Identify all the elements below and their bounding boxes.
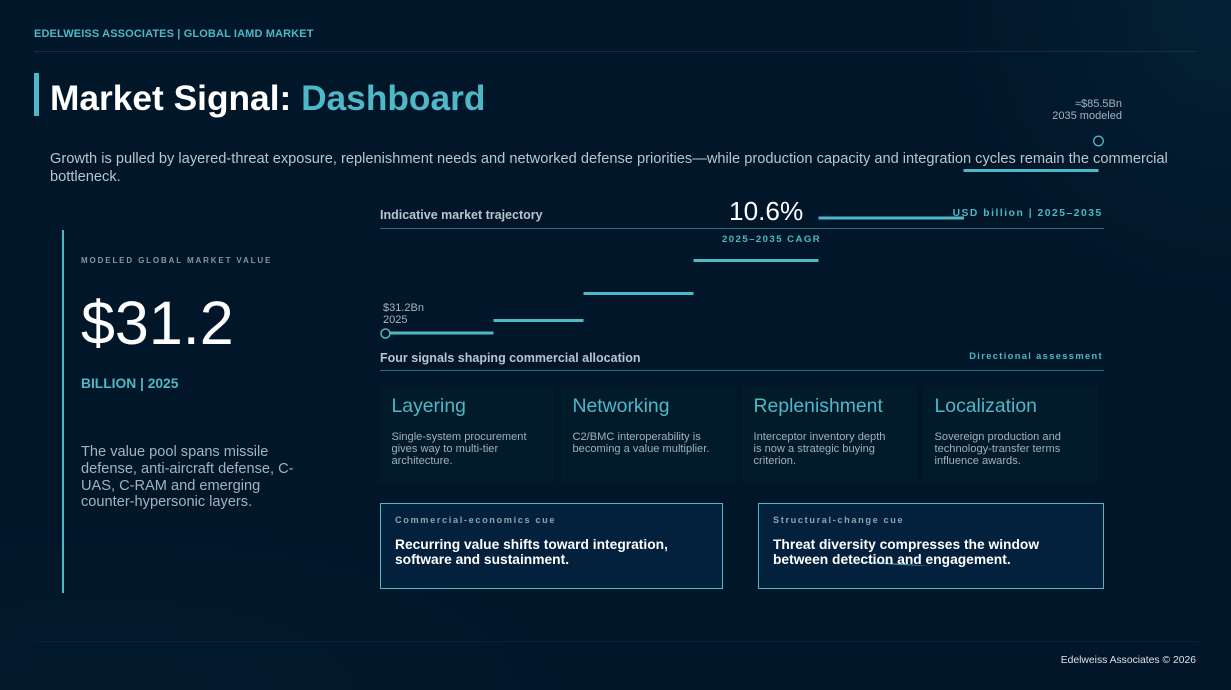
card heading: Networking [572,395,670,417]
card text: becoming a value multiplier. [572,443,709,455]
market value label: MODELED GLOBAL MARKET VALUE [81,256,272,265]
callout: commercial economics [380,503,723,589]
card heading: Replenishment [754,395,883,417]
callout message: Threat diversity compresses the window [773,537,1039,552]
card text: influence awards. [934,455,1021,467]
card: networking [561,386,736,483]
callout message: between detection and engagement. [773,552,1011,567]
end point label [1052,98,1122,122]
card text: C2/BMC interoperability is [572,431,701,443]
card text: Sovereign production and [934,431,1061,443]
card text: technology-transfer terms [934,443,1060,455]
card text: is now a strategic buying [754,443,875,455]
title: Market Signal: Dashboard [50,79,485,118]
card heading: Layering [392,395,466,417]
card text [934,431,1061,467]
market value figure: $31.2 [81,289,234,357]
card text: architecture. [392,455,453,467]
start point label: 2025 [383,314,407,326]
panel: market value [62,230,332,593]
eyebrow header: EDELWEISS ASSOCIATES | GLOBAL IAMD MARKET [34,28,314,40]
end point label: ≈$85.5Bn [1075,98,1122,110]
callout message [395,537,668,567]
callout: structural change [758,503,1104,589]
subtitle: Growth is pulled by layered-threat exposure, replenishment needs and networked defense priorities—while production capacity and integration cycles remain the commercial bottleneck. [50,151,1168,185]
card text [572,431,709,455]
market value unit: BILLION | 2025 [81,376,178,391]
title accent bar [34,73,39,116]
signals note: Directional assessment [969,351,1103,361]
start point label [383,302,424,326]
CAGR label: 2025–2035 CAGR [722,234,821,245]
card text: criterion. [754,455,796,467]
card text: Single-system procurement [392,431,527,443]
callout label: Commercial-economics cue [395,515,556,525]
signals heading: Four signals shaping commercial allocation [380,351,640,365]
callout message: software and sustainment. [395,552,569,567]
start point label: $31.2Bn [383,302,424,314]
callout label: Structural-change cue [773,515,904,525]
card: replenishment [742,386,917,483]
trajectory heading: Indicative market trajectory [380,208,543,222]
card heading: Localization [934,395,1037,417]
callout message: Recurring value shifts toward integration, [395,537,668,552]
footer: Edelweiss Associates © 2026 [1061,655,1196,666]
CAGR figure: 10.6% [729,196,803,226]
end point label: 2035 modeled [1052,110,1122,122]
market value description: The value pool spans missile defense, anti-aircraft defense, C-UAS, C-RAM and emerging counter-hypersonic layers. [81,444,294,510]
card text: Interceptor inventory depth [754,431,885,443]
card: localization [923,386,1098,483]
card: layering [380,386,555,483]
callout message [773,537,1040,567]
trajectory units: USD billion | 2025–2035 [953,208,1103,219]
card text: gives way to multi-tier [392,443,498,455]
card text [754,431,885,467]
card text [392,431,527,467]
